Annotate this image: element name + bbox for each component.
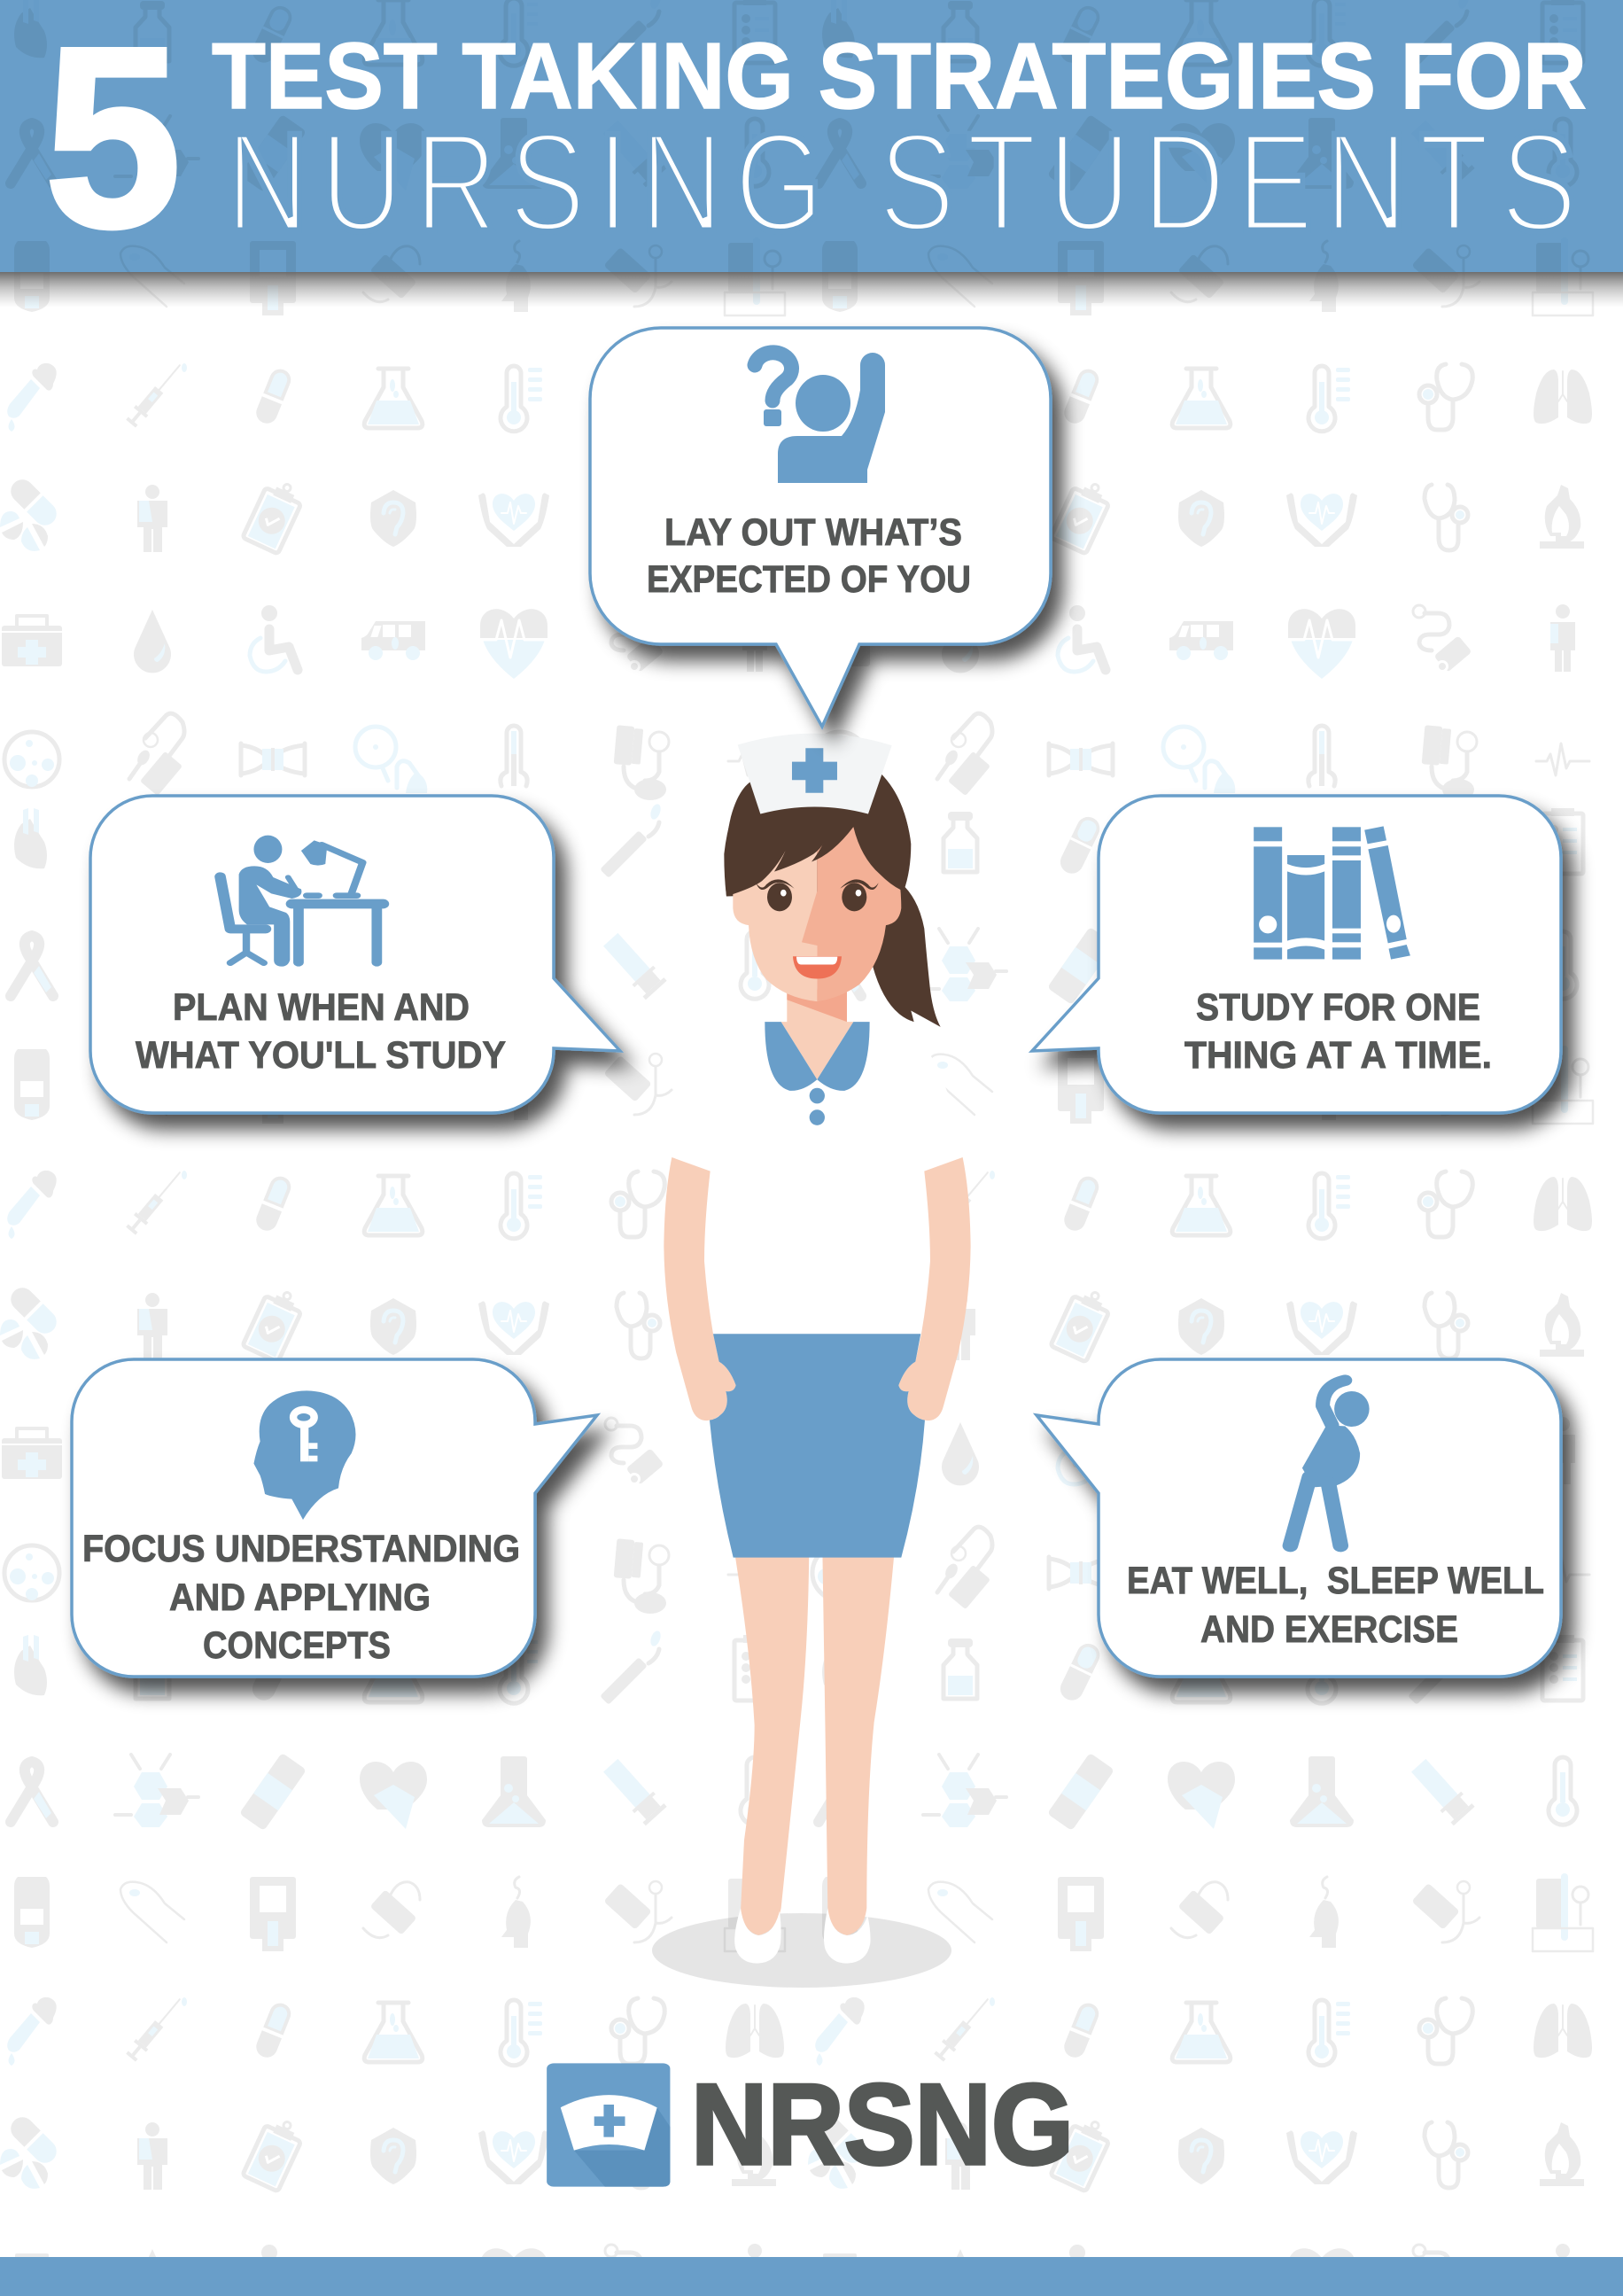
label	[82, 1528, 520, 1667]
icon: person studying at desk	[221, 836, 383, 967]
footer bar	[0, 2257, 1623, 2296]
callout: study for one thing at a time	[1032, 796, 1561, 1113]
callout: focus understanding and applying concepts	[72, 1359, 597, 1677]
callout: plan when and what you'll study	[90, 796, 620, 1113]
header banner: NURSING STUDENTS	[226, 104, 1577, 261]
head	[724, 734, 911, 1001]
collar	[765, 1022, 870, 1125]
callout: eat well, sleep well and exercise	[1037, 1359, 1561, 1677]
cap	[738, 734, 892, 814]
header shadow	[0, 272, 1623, 307]
logo: NRSNG	[547, 2059, 1074, 2189]
callout: lay out what's expected of you	[590, 328, 1051, 727]
shoes	[734, 1908, 871, 1964]
header banner: 5	[44, 0, 182, 281]
label: STUDY FOR ONE	[1196, 986, 1480, 1029]
icon: raised hand with question mark	[755, 353, 885, 483]
header banner	[0, 0, 1623, 272]
skirt	[710, 1334, 925, 1558]
label: FOCUS UNDERSTANDING	[82, 1528, 520, 1570]
ponytail	[873, 883, 941, 1027]
label	[1127, 1560, 1544, 1651]
mouth	[793, 956, 842, 979]
label: CONCEPTS	[203, 1624, 391, 1667]
fringe	[724, 773, 909, 897]
floor shadow	[652, 1913, 951, 1988]
nurse figure	[652, 734, 971, 1988]
label: PLAN WHEN AND	[173, 986, 470, 1029]
neck	[781, 990, 853, 1079]
label: AND APPLYING	[169, 1576, 431, 1619]
label: LAY OUT WHAT’S	[664, 511, 962, 554]
icon: head with key	[253, 1390, 356, 1520]
label: EXPECTED OF YOU	[647, 558, 971, 601]
eyes	[756, 879, 879, 911]
label: WHAT YOU'LL STUDY	[136, 1034, 506, 1077]
label	[1184, 986, 1492, 1077]
legs	[734, 1548, 895, 1935]
icon: person stretching	[1290, 1381, 1370, 1545]
label: AND EXERCISE	[1200, 1608, 1458, 1651]
wordmark: NRSNG	[691, 2059, 1074, 2189]
label: THING AT A TIME.	[1184, 1034, 1492, 1077]
shirt	[672, 1019, 963, 1338]
logo badge	[547, 2063, 670, 2187]
icon: books	[1254, 826, 1410, 960]
label	[647, 511, 971, 601]
label	[136, 986, 506, 1077]
arms	[664, 1157, 971, 1420]
label: EAT WELL, SLEEP WELL	[1127, 1560, 1544, 1602]
